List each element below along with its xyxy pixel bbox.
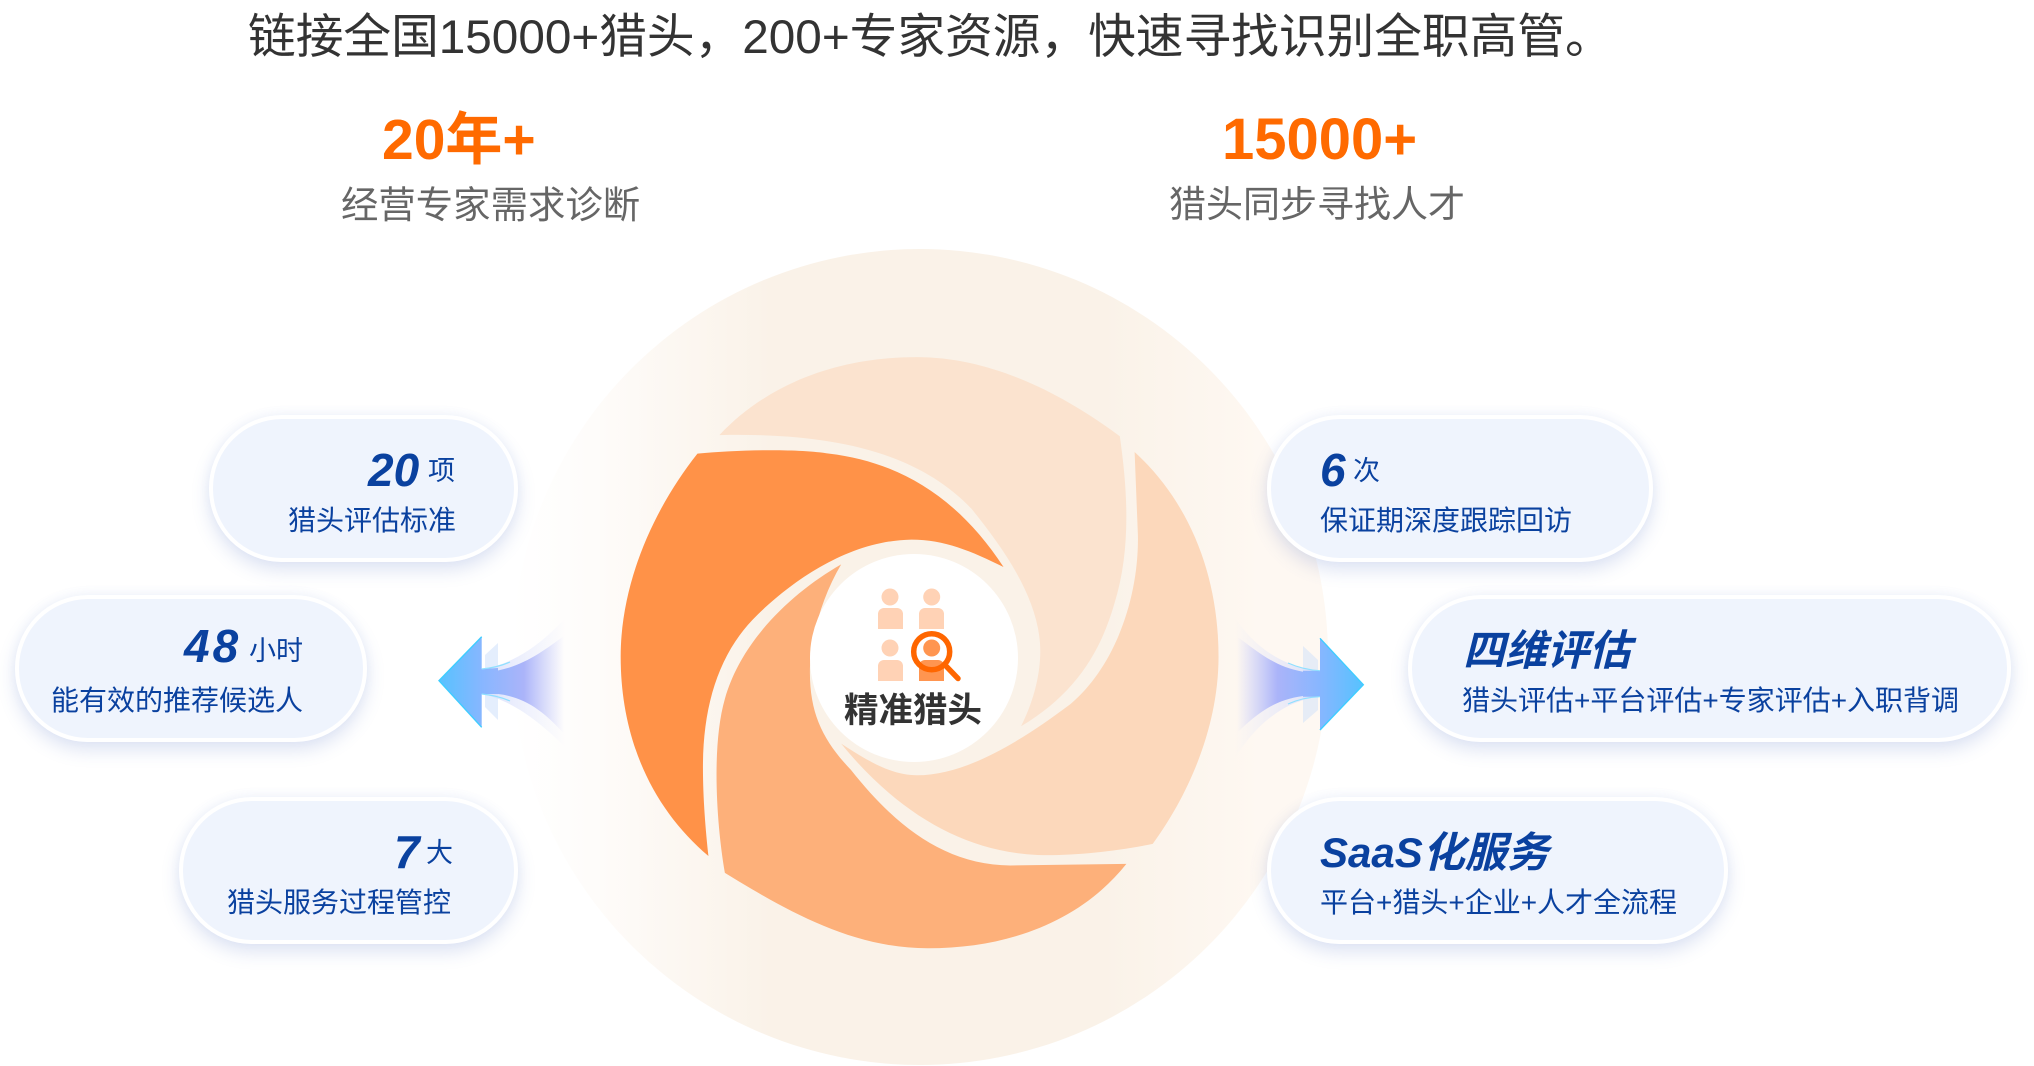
card text: 能有效的推荐候选人 [51,685,303,716]
card text: 猎头评估标准 [288,505,456,536]
card: SaaS service [1267,797,1728,944]
petal: left [621,450,1004,856]
card: 20 criteria [209,415,518,562]
stat value: 15000+ [1222,107,1417,172]
card: 6 follow-ups [1267,415,1653,562]
petal: bottom [717,564,1126,948]
arrow: right [1235,618,1363,758]
card: 48 hours [15,595,367,742]
card text: 平台+猎头+企业+人才全流程 [1320,887,1677,918]
center white disc [810,554,1018,762]
center label: 精准猎头 [844,692,982,730]
card unit: 项 [428,456,455,486]
card title: 四维评估 [1463,627,1631,674]
card: 7 controls [179,797,518,944]
stat: 20 years [341,108,640,226]
background circle [512,249,1328,1065]
stat value: 20年+ [382,108,536,172]
card value: 20 [368,444,419,496]
petal: right [841,452,1219,855]
stat: 15000 headhunters [1169,107,1465,225]
swirl petals [621,357,1219,948]
main heading: 链接全国15000+猎头，200+专家资源，快速寻找识别全职高管。 [248,11,1613,64]
stat caption: 经营专家需求诊断 [341,184,640,226]
card: four-dimension evaluation [1408,595,2011,742]
icon: people with magnifier [878,588,958,681]
card text: 保证期深度跟踪回访 [1320,505,1572,536]
petal: top [719,357,1126,726]
stat caption: 猎头同步寻找人才 [1169,184,1465,225]
card title: SaaS化服务 [1320,829,1549,876]
card unit: 小时 [249,636,303,666]
card text: 猎头评估+平台评估+专家评估+入职背调 [1462,685,1959,716]
card value: 48 [184,620,241,672]
card value: 7 [394,826,420,878]
card unit: 次 [1353,456,1380,486]
arrow: left [439,618,565,747]
card unit: 大 [426,838,453,868]
card text: 猎头服务过程管控 [227,887,451,918]
card value: 6 [1320,444,1346,496]
